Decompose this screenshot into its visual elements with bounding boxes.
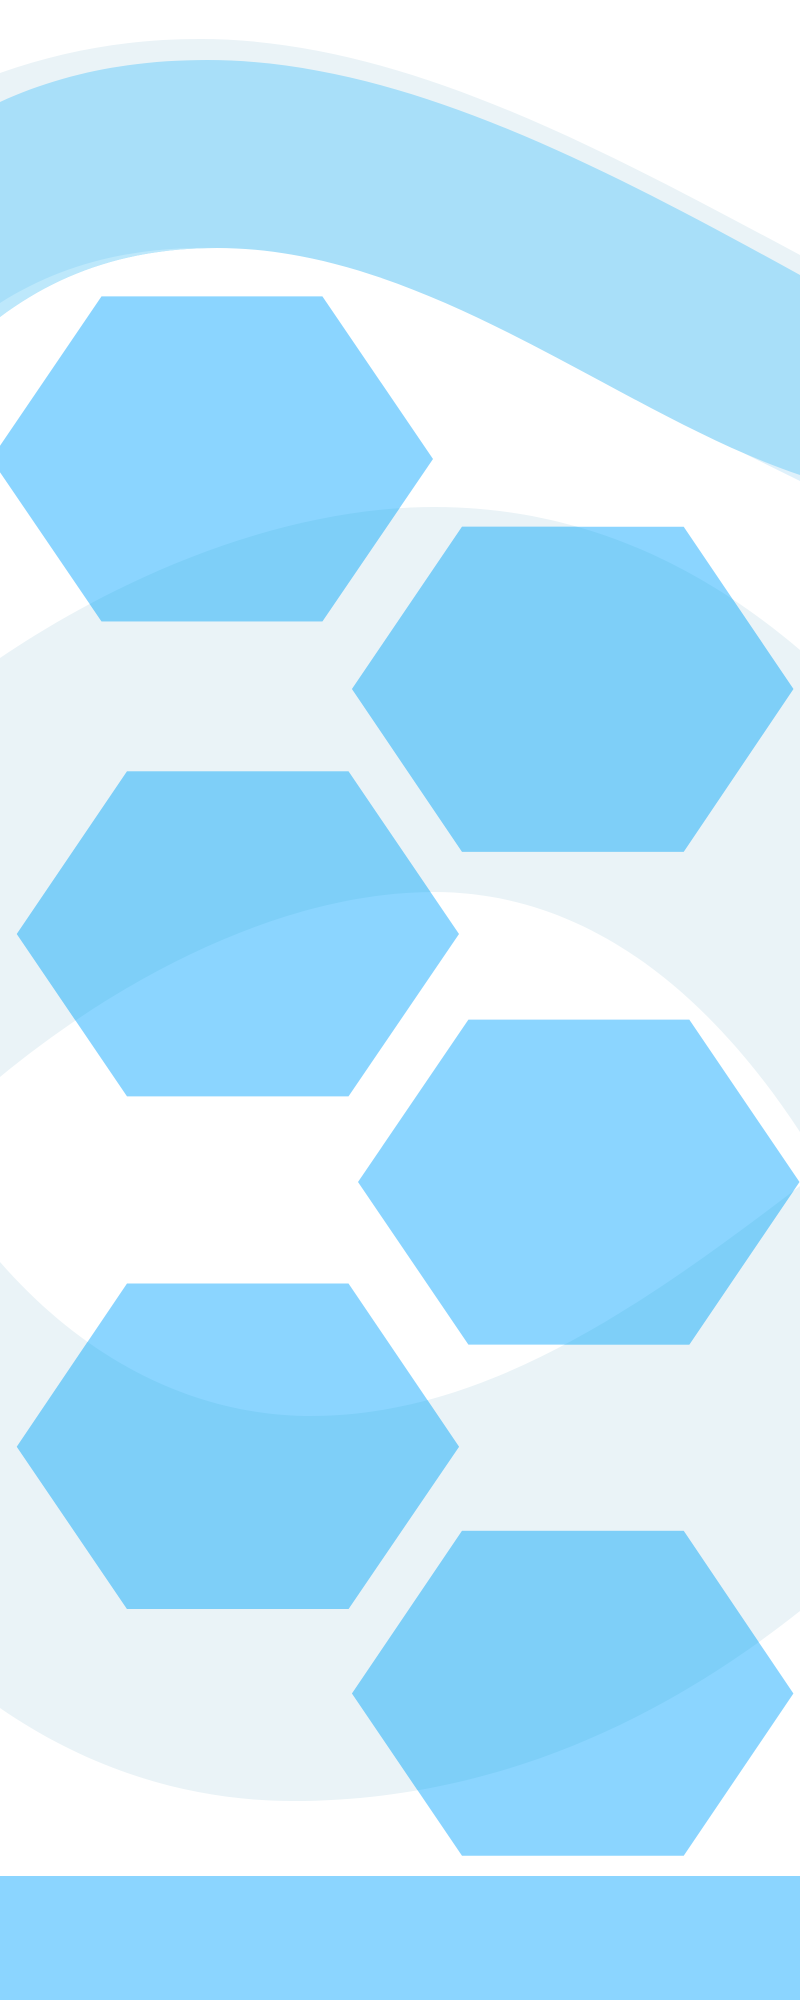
background wave: pale band with white centre [0,507,800,1801]
top wave: lighter left sliver [0,248,217,317]
top wave: lighter right sliver [705,434,800,481]
hexagon 2 [352,527,793,852]
hexagon 6 [352,1531,793,1856]
top wave: blue band [0,60,800,475]
hexagon 1 [0,296,433,621]
footer bar [0,1876,800,2000]
hexagon overlap tint where the pale band crosses [16,508,794,1790]
hexagon 4 [358,1020,800,1345]
hexagon 5 [17,1284,459,1609]
top wave: pale back band [0,39,800,300]
hexagon 3 [17,771,459,1096]
